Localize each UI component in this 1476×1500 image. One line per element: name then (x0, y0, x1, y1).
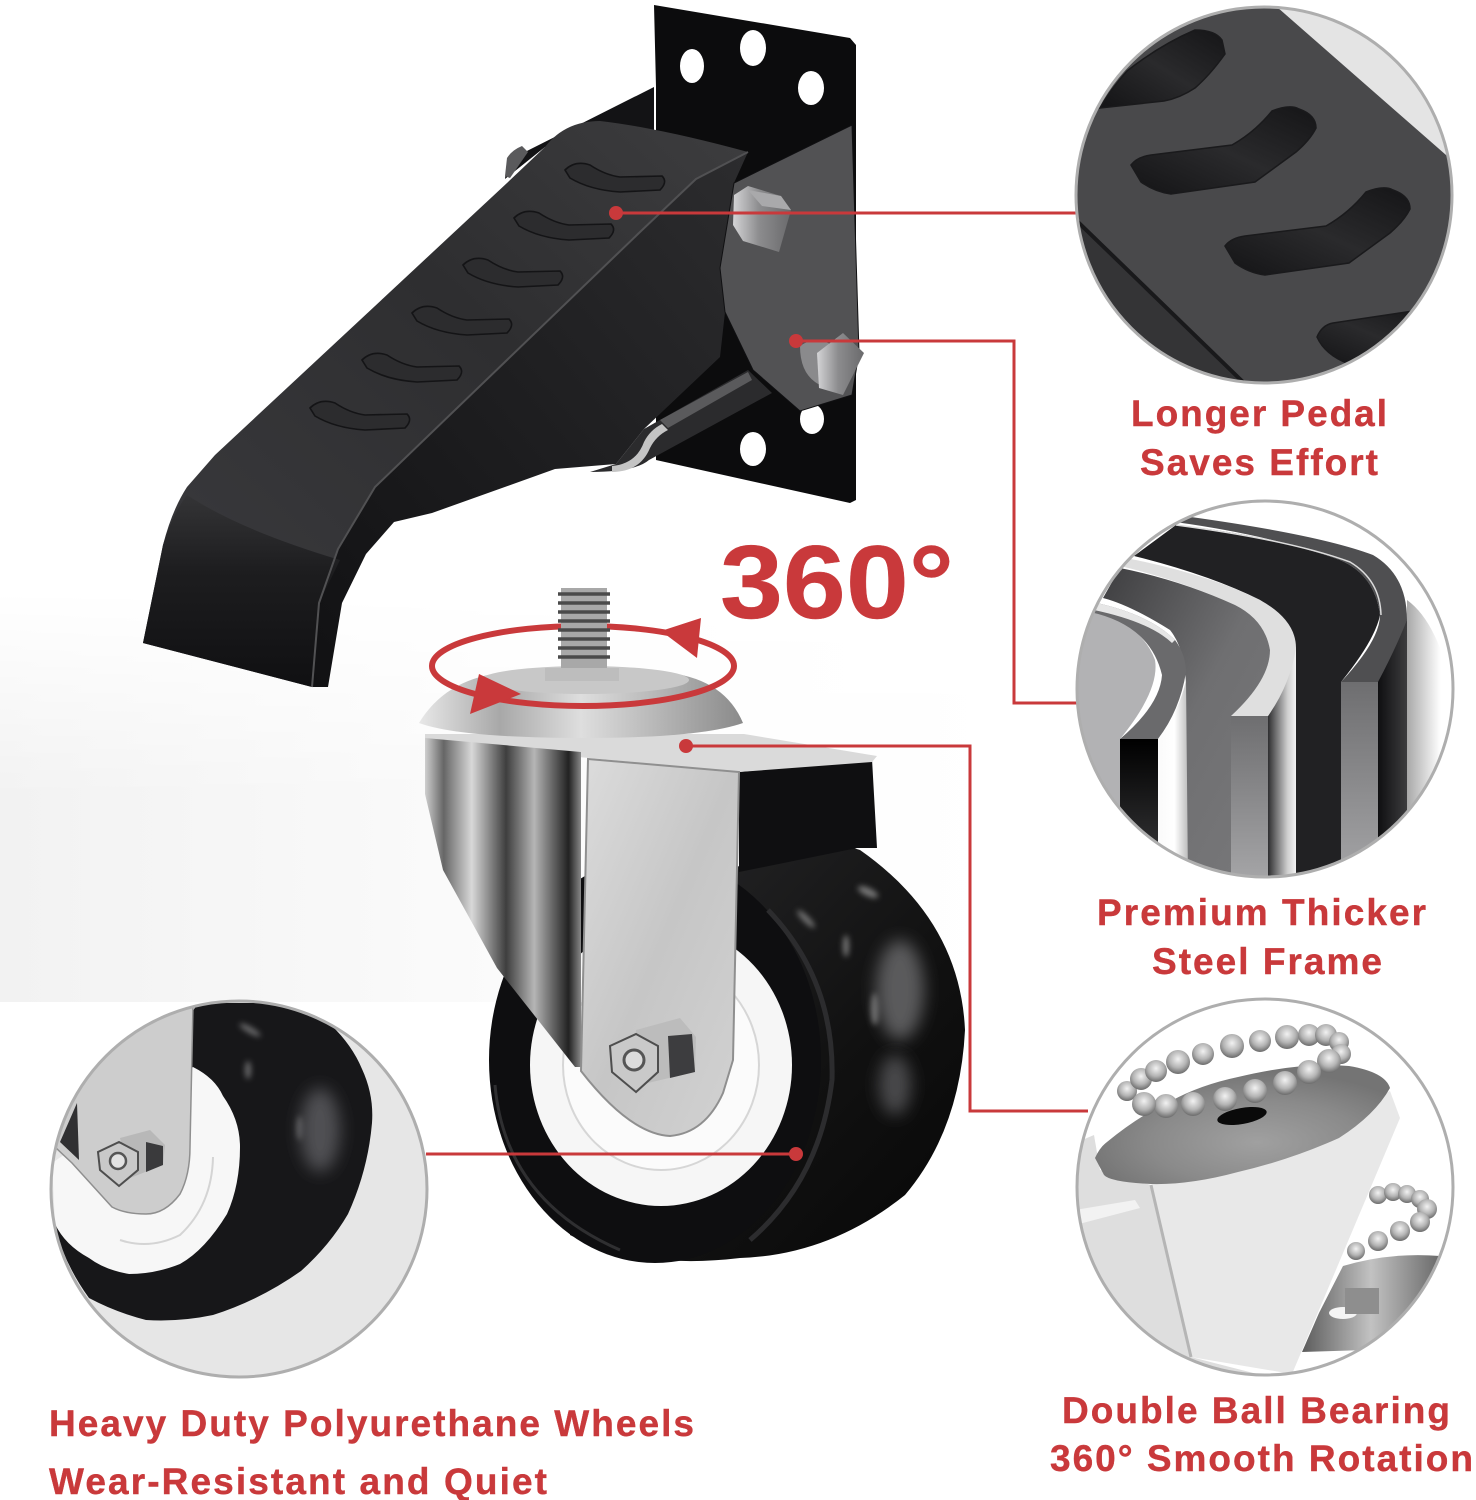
label: Double Ball Bearing (1050, 1390, 1473, 1479)
rear tyre (570, 842, 965, 1261)
big label: 360 degrees: 360° (720, 525, 954, 641)
label: Premium Thicker: Steel Frame (1152, 941, 1382, 982)
fork (425, 734, 877, 1136)
spring arm (590, 370, 772, 472)
front tyre (489, 857, 821, 1263)
white hub (530, 924, 792, 1206)
label: Longer Pedal: Saves Effort (1140, 442, 1378, 483)
side plate (720, 125, 859, 411)
arrow: rotation (432, 618, 734, 714)
label: Longer Pedal: Longer Pedal (1131, 393, 1387, 434)
label: Double Ball Bearing: Double Ball Bearing (1062, 1390, 1450, 1431)
icon: bearing balls (1117, 1024, 1437, 1260)
icon: pedal assembly with mounting bracket (143, 5, 864, 687)
background glow (0, 724, 276, 1002)
panel: ball bearing detail circle (1070, 999, 1453, 1385)
axle bolt (610, 1018, 696, 1092)
panel: wheel detail circle (51, 1001, 427, 1377)
icon: caster wheel (419, 588, 965, 1263)
pedal (143, 121, 748, 687)
callout lines and dots (426, 206, 1088, 1161)
label: Premium Thicker: Premium Thicker (1097, 892, 1426, 933)
mounting plate (505, 5, 856, 503)
threaded stem (545, 588, 619, 681)
panel: steel frame detail circle (1077, 501, 1455, 880)
label: Heavy Duty Polyurethane Wheels (49, 1403, 694, 1500)
label: Double Ball Bearing: 360° Smooth Rotation (1050, 1438, 1473, 1479)
panel: pedal detail circle (1070, 0, 1476, 390)
dome (419, 666, 743, 738)
label: Longer Pedal (1131, 393, 1387, 483)
hex bolts (733, 186, 864, 395)
label: Premium Thicker (1097, 892, 1426, 982)
label: Heavy Duty Polyurethane Wheels: Heavy Duty Polyurethane Wheels (49, 1403, 694, 1444)
pedal treads (310, 163, 665, 430)
